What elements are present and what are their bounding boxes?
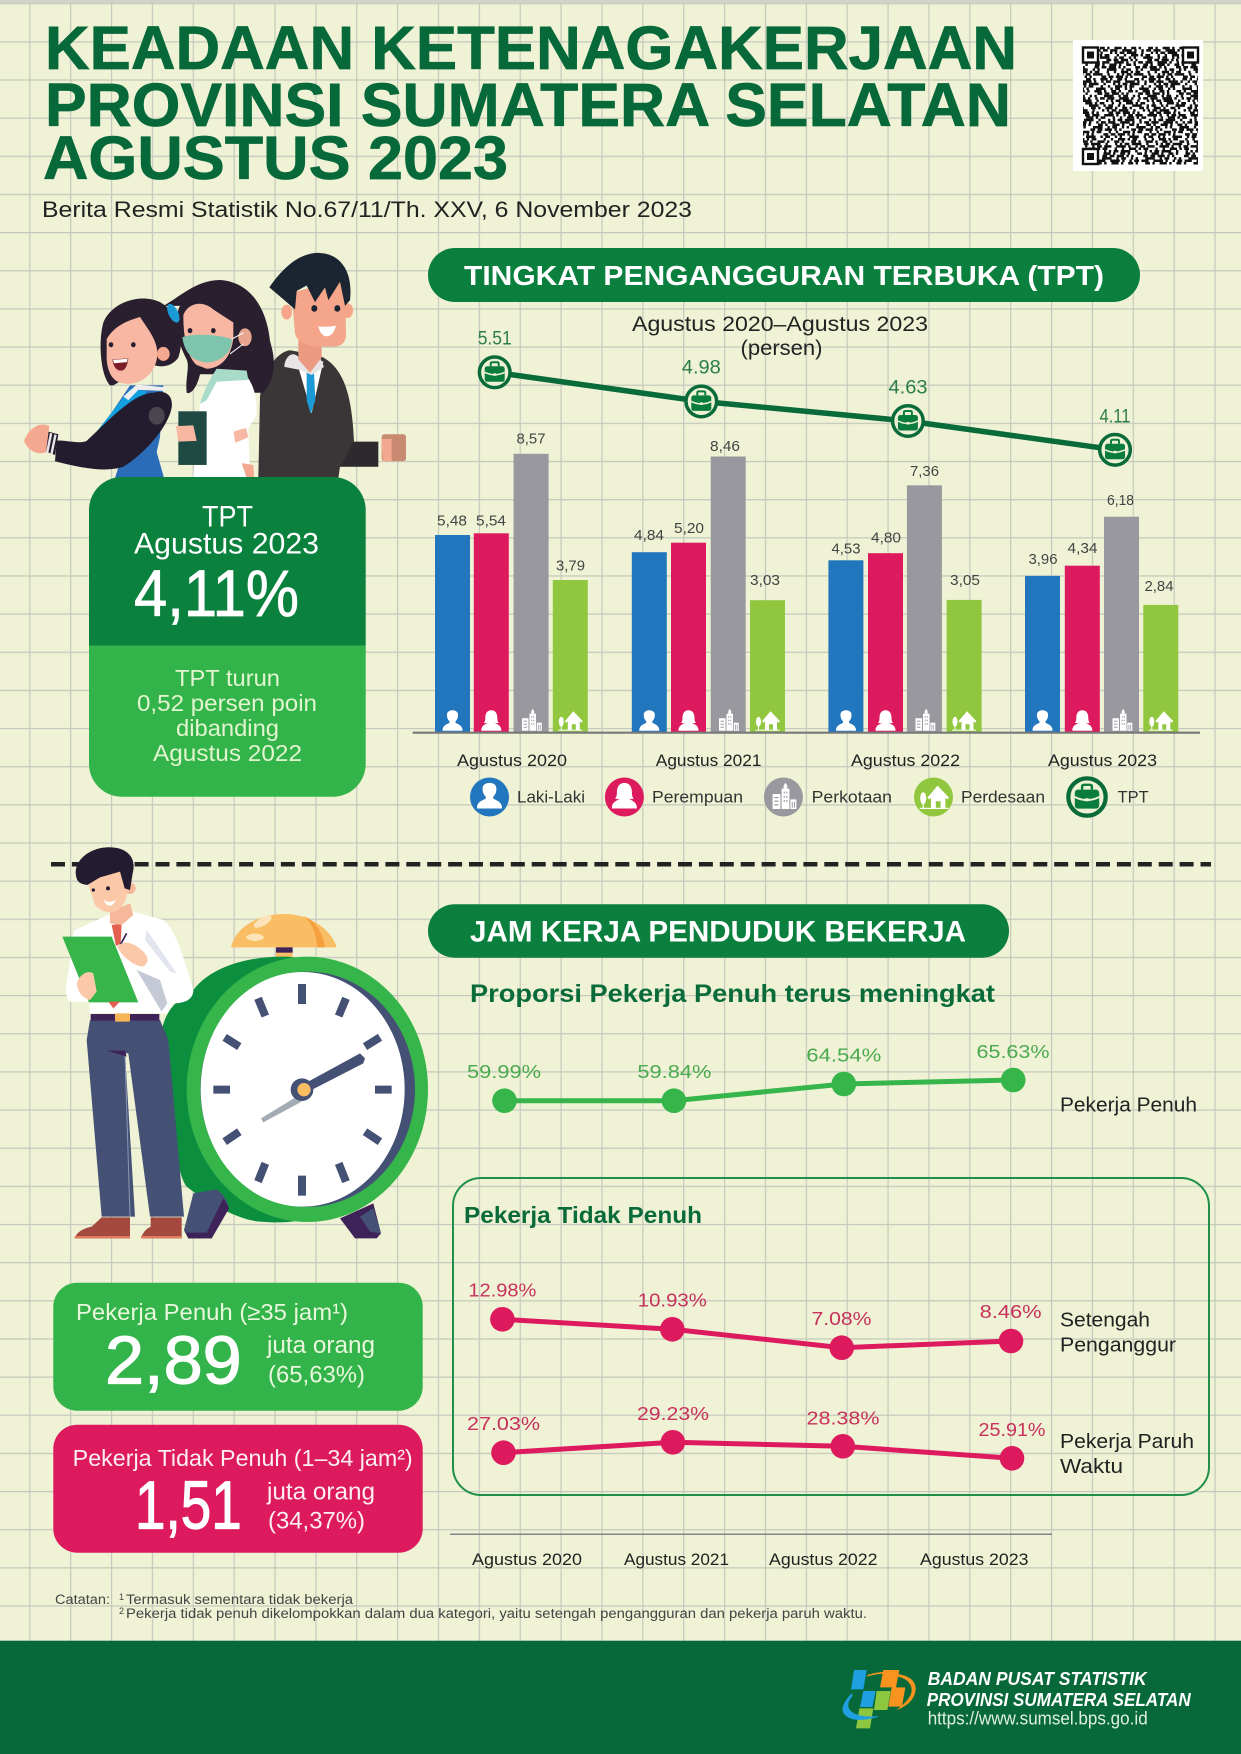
title: PROVINSI SUMATERA SELATAN [45, 71, 1011, 139]
panel heading: Pekerja Tidak Penuh [464, 1202, 702, 1228]
illustration: three workers [24, 253, 406, 478]
subheading: proporsi: Proporsi Pekerja Penuh terus meningkat [470, 980, 996, 1008]
footer band [0, 1641, 1241, 1754]
bar chart: TPT by category: 4,84 [634, 528, 664, 544]
bar chart: TPT by category: 3,96 [1028, 552, 1058, 568]
panel: TPT Agustus 2023 card: TPT [202, 501, 253, 534]
heading pill: jam kerja: JAM KERJA PENDUDUK BEKERJA [470, 916, 966, 949]
line chart: pekerja paruh waktu: 27.03% [467, 1413, 540, 1434]
footer text [927, 1669, 1192, 1728]
bar chart: TPT by category: 8,46 [710, 439, 740, 455]
bar chart: TPT by category: 5,54 [476, 514, 506, 530]
x axis: jam kerja [450, 1534, 1052, 1569]
title: KEADAAN KETENAGAKERJAAN [45, 14, 1017, 82]
legend: Perempuan [652, 788, 743, 806]
panel: TPT Agustus 2023 card: Agustus 2022 [153, 740, 302, 766]
illustration: alarm clock [163, 913, 428, 1238]
heading pill: TPT [428, 248, 1140, 302]
chart subtitle [632, 312, 928, 360]
bar chart: TPT by category: 3,79 [556, 558, 585, 574]
card: pekerja tidak penuh: 1,51 [135, 1467, 242, 1543]
line chart: setengah penganggur: 10.93% [638, 1290, 707, 1311]
footnotes: Catatan: [55, 1592, 110, 1607]
panel: TPT Agustus 2023 card: TPT turun [175, 665, 280, 691]
section divider [51, 862, 1211, 867]
title [43, 14, 1017, 192]
legend [470, 778, 1149, 816]
bar chart: TPT by category: 6,18 [1107, 493, 1134, 509]
bar chart: TPT by category: 5,48 [437, 514, 467, 530]
card: pekerja penuh [53, 1283, 423, 1411]
bar chart: TPT by category: 2,84 [1144, 579, 1174, 595]
line chart: TPT: 4.63 [888, 378, 928, 399]
bar chart: TPT by category: 7,36 [910, 464, 939, 480]
panel: TPT Agustus 2023 card: Agustus 2023 [134, 528, 319, 561]
line chart: pekerja paruh waktu: 25.91% [978, 1419, 1046, 1440]
card: pekerja penuh: Pekerja Penuh (≥35 jam¹) [76, 1299, 348, 1325]
card: pekerja penuh: (65,63%) [268, 1362, 365, 1389]
footnotes: Termasuk sementara tidak bekerja [126, 1592, 354, 1607]
chart subtitle: (persen) [740, 336, 822, 360]
panel: TPT Agustus 2023 card [89, 477, 366, 797]
line chart: pekerja paruh waktu: Waktu [1060, 1456, 1123, 1478]
line chart: setengah penganggur [468, 1280, 1176, 1360]
panel: TPT Agustus 2023 card: 4,11% [134, 556, 299, 630]
bar chart: TPT by category: Agustus 2023 [1048, 752, 1157, 770]
line chart: pekerja paruh waktu [467, 1403, 1194, 1478]
x axis: jam kerja: Agustus 2021 [624, 1550, 729, 1569]
x axis: jam kerja: Agustus 2022 [769, 1550, 878, 1569]
footer text: BADAN PUSAT STATISTIK [928, 1669, 1149, 1689]
line chart: pekerja penuh [467, 1041, 1197, 1117]
bar chart: TPT by category: 4,53 [832, 542, 860, 558]
subtitle: Berita Resmi Statistik No.67/11/Th. XXV, 6 November 2023 [42, 197, 692, 222]
bar chart: TPT by category [413, 432, 1200, 770]
line chart: pekerja paruh waktu: Pekerja Paruh [1060, 1431, 1194, 1453]
legend: TPT [1118, 788, 1149, 806]
line chart: setengah penganggur: Setengah [1060, 1310, 1150, 1332]
bar chart: TPT by category: 3,03 [750, 573, 780, 589]
footnotes [55, 1592, 867, 1621]
card: pekerja tidak penuh [53, 1425, 423, 1553]
footnotes: Pekerja tidak penuh dikelompokkan dalam dua kategori, yaitu setengah pengangguran dan pekerja paruh waktu. [126, 1606, 867, 1621]
bar chart: TPT by category: Agustus 2021 [656, 752, 762, 770]
chart subtitle: Agustus 2020–Agustus 2023 [632, 312, 928, 336]
card: pekerja penuh: juta orang [266, 1332, 375, 1359]
line chart: TPT: 4.11 [1100, 407, 1130, 428]
card: pekerja penuh: 2,89 [105, 1322, 242, 1398]
heading pill: TPT: TINGKAT PENGANGGURAN TERBUKA (TPT) [464, 260, 1104, 291]
line chart: pekerja penuh: 64.54% [806, 1045, 881, 1066]
x axis: jam kerja: Agustus 2020 [472, 1550, 582, 1569]
line chart: pekerja penuh: 59.99% [467, 1061, 541, 1082]
bar chart: TPT by category: 4,80 [871, 530, 901, 546]
line chart: setengah penganggur: 8.46% [980, 1301, 1042, 1322]
footnotes: 1 [119, 1592, 124, 1602]
line chart: setengah penganggur: 7.08% [812, 1308, 872, 1329]
line chart: pekerja paruh waktu: 28.38% [806, 1407, 880, 1428]
x axis: jam kerja: Agustus 2023 [920, 1550, 1028, 1569]
line chart: TPT: 5.51 [478, 329, 512, 350]
card: pekerja tidak penuh: (34,37%) [268, 1507, 365, 1534]
line chart: setengah penganggur: Penganggur [1060, 1335, 1176, 1357]
line chart: pekerja penuh: 59.84% [637, 1061, 711, 1082]
card: pekerja tidak penuh: Pekerja Tidak Penuh (1–34 jam²) [73, 1445, 413, 1471]
heading pill: jam kerja [428, 904, 1009, 958]
illustration: worker with clipboard [62, 847, 193, 1238]
panel: TPT Agustus 2023 card: dibanding [176, 715, 279, 741]
line chart: TPT [478, 329, 1130, 465]
line chart: pekerja penuh: Pekerja Penuh [1060, 1095, 1197, 1117]
legend: Perdesaan [961, 788, 1045, 806]
bar chart: TPT by category: 3,05 [950, 573, 980, 589]
line chart: TPT: 4.98 [682, 358, 721, 379]
line chart: setengah penganggur: 12.98% [468, 1280, 536, 1301]
card: pekerja tidak penuh: juta orang [266, 1478, 375, 1505]
QR code [1073, 40, 1203, 171]
legend: Perkotaan [812, 788, 892, 806]
legend: Laki-Laki [517, 788, 585, 806]
footer text: PROVINSI SUMATERA SELATAN [927, 1690, 1192, 1710]
bar chart: TPT by category: Agustus 2022 [851, 752, 960, 770]
bar chart: TPT by category: Agustus 2020 [457, 752, 567, 770]
line chart: pekerja penuh: 65.63% [976, 1041, 1050, 1062]
panel: TPT Agustus 2023 card: 0,52 persen poin [137, 690, 317, 716]
footer text: https://www.sumsel.bps.go.id [928, 1708, 1148, 1728]
footnotes: 2 [119, 1606, 124, 1616]
line chart: pekerja paruh waktu: 29.23% [637, 1403, 709, 1424]
bar chart: TPT by category: 4,34 [1068, 541, 1098, 557]
icon: BPS logo [843, 1670, 916, 1728]
title: AGUSTUS 2023 [43, 124, 508, 192]
bar chart: TPT by category: 5,20 [674, 521, 704, 537]
bar chart: TPT by category: 8,57 [516, 432, 546, 448]
panel: pekerja tidak penuh [453, 1178, 1209, 1495]
